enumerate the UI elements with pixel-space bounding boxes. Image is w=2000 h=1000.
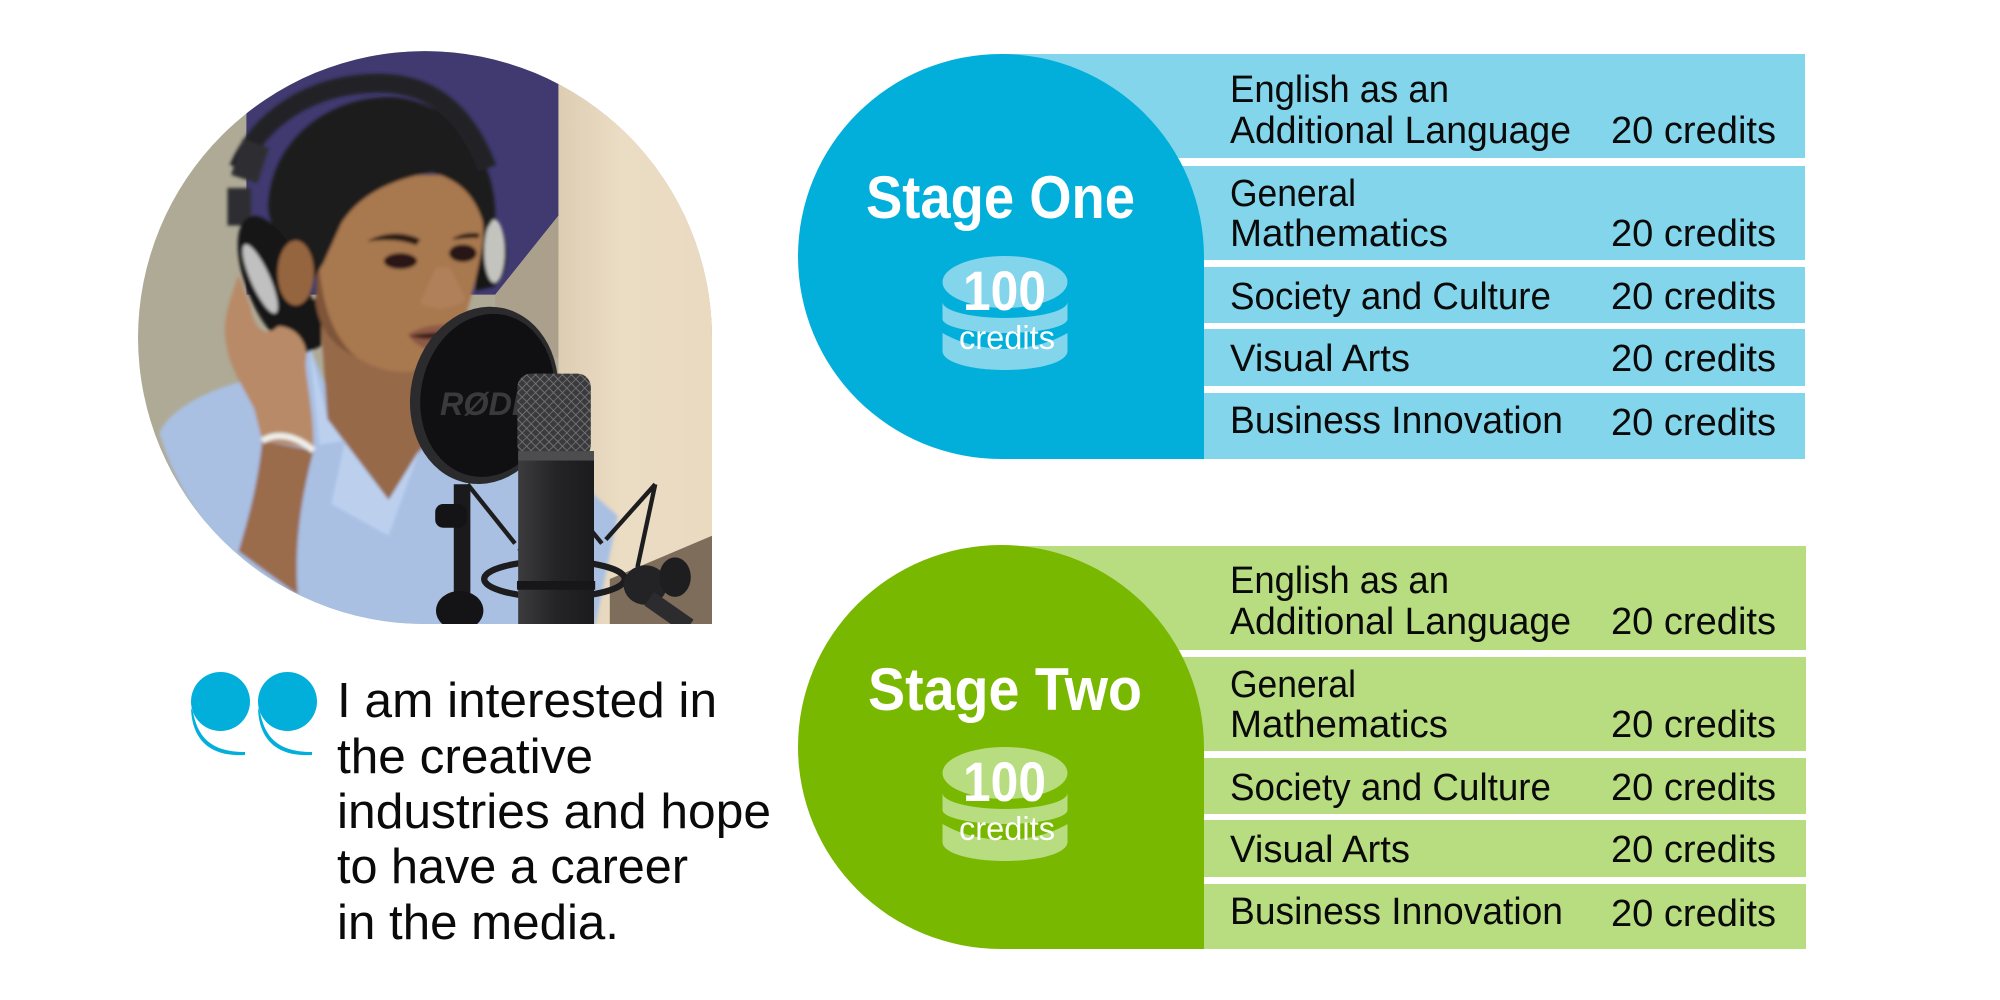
Stage Two subject list: Additional Language [1230, 601, 1571, 643]
Stage One 100 credits label: credits [959, 319, 1055, 356]
Stage Two credit stack icon [942, 747, 1068, 861]
Stage Two 100 credits label [959, 750, 1055, 847]
quote text: I am interested in [337, 674, 717, 728]
Stage One 100 credits label: 100 [963, 259, 1046, 322]
panel: Stage One [798, 54, 1805, 459]
Stage One subject list: 20 credits [1611, 276, 1776, 318]
quote text: to have a career [337, 840, 688, 894]
photo background wall [138, 51, 712, 624]
microphone and shock mount [435, 374, 691, 630]
Stage Two subject list: Visual Arts [1230, 829, 1410, 871]
Stage Two subject list: Society and Culture [1230, 767, 1551, 809]
Stage One subject list: Visual Arts [1230, 338, 1410, 380]
Stage Two subject list: 20 credits [1611, 767, 1776, 809]
Stage Two badge [798, 545, 1204, 949]
person [160, 83, 618, 630]
Stage Two subject list: Business Innovation [1230, 891, 1563, 933]
Stage One heading: Stage One [866, 164, 1135, 231]
Stage One subject list: Business Innovation [1230, 400, 1563, 442]
Stage Two subject list: Mathematics [1230, 704, 1448, 746]
Stage Two subject list: 20 credits [1611, 601, 1776, 643]
quote text [337, 674, 771, 950]
Stage One subject list: English as an [1230, 69, 1449, 111]
quote text: industries and hope [337, 785, 771, 839]
quote text: in the media. [337, 896, 619, 950]
Stage Two subject list: English as an [1230, 560, 1449, 602]
quotation mark icon [191, 672, 317, 755]
Stage One subject list: 20 credits [1611, 213, 1776, 255]
Stage One subject list: Additional Language [1230, 110, 1571, 152]
panel: Stage Two [798, 545, 1806, 949]
pop filter: RØDE [440, 386, 535, 422]
Stage One subject list: 20 credits [1611, 402, 1776, 444]
Stage One subject rows [1001, 54, 1805, 459]
Stage One 100 credits label [959, 259, 1055, 356]
Stage One credit stack icon [942, 256, 1068, 370]
Stage One subject list: 20 credits [1611, 110, 1776, 152]
Stage Two subject list: General [1230, 664, 1356, 706]
Stage Two subject list: 20 credits [1611, 829, 1776, 871]
quote text: the creative [337, 730, 593, 784]
Stage Two heading: Stage Two [868, 656, 1142, 723]
Stage Two subject rows [1001, 546, 1806, 949]
Stage One subject list: General [1230, 173, 1356, 215]
Stage One subject list [1230, 69, 1776, 444]
Stage Two subject list: 20 credits [1611, 704, 1776, 746]
Stage One subject list: Mathematics [1230, 213, 1448, 255]
pop filter [410, 306, 558, 484]
Stage Two 100 credits label: 100 [963, 750, 1046, 813]
Stage One badge [798, 54, 1204, 459]
Stage Two 100 credits label: credits [959, 810, 1055, 847]
photo: student speaking into a studio microphone [138, 51, 712, 624]
Stage One subject list: 20 credits [1611, 338, 1776, 380]
Stage One subject list: Society and Culture [1230, 276, 1551, 318]
Stage Two subject list: 20 credits [1611, 893, 1776, 935]
Stage Two subject list [1230, 560, 1776, 935]
